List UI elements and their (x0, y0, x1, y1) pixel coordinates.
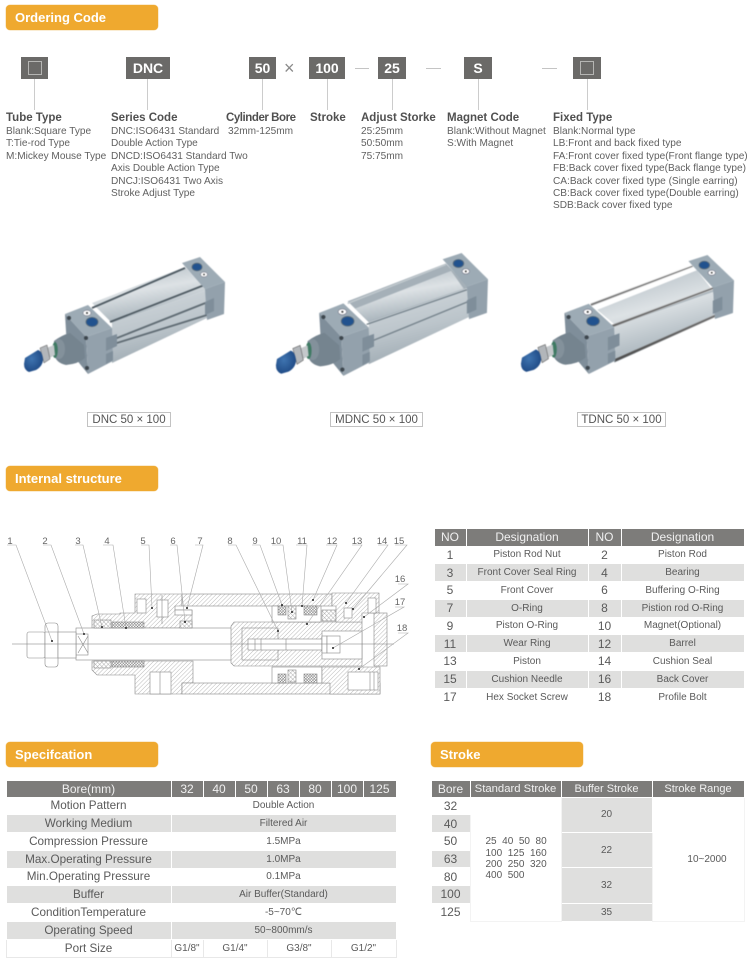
table: specification: Compression Pressure (29, 835, 148, 848)
table: stroke: 100 (440, 887, 461, 901)
label: tube type: Tube Type (6, 112, 62, 124)
code box: fixed type (573, 57, 601, 79)
table: part designations: 11 (444, 637, 456, 651)
table: stroke: 63 (444, 852, 457, 866)
table: specification (6, 781, 397, 958)
label: cylinder bore (226, 112, 296, 137)
leader lines and numbers (7, 545, 408, 670)
table: part designations: Front Cover Seal Ring (478, 567, 576, 578)
label: series code (111, 112, 248, 199)
code box: 100 (309, 57, 345, 79)
table: part designations: 14 (598, 654, 611, 668)
table: stroke: 40 (444, 817, 457, 831)
table: part designations: Pistion rod O-Ring (642, 603, 723, 614)
label: series code: DNCD:ISO6431 Standard Two (111, 151, 248, 162)
front cover (92, 594, 193, 694)
table: part designations: Buffering O-Ring (645, 585, 720, 596)
table: stroke: 20 (601, 809, 612, 820)
table: part designations: 12 (598, 637, 611, 651)
table: part designations: 16 (598, 672, 611, 686)
table: part designations: 6 (601, 583, 608, 597)
piston rod (76, 628, 242, 660)
label: cylinder bore: Cylinder Bore (226, 112, 296, 124)
table: part designations: Piston Rod Nut (493, 549, 561, 560)
table: part designations: 2 (601, 548, 608, 562)
table: specification: 50 (244, 782, 258, 796)
cross-section diagram: 11 (297, 536, 307, 547)
table: part designations (435, 529, 744, 704)
table: part designations: Magnet(Optional) (644, 620, 721, 631)
table: specification: 0.1MPa (266, 871, 301, 882)
label: fixed type (553, 112, 748, 211)
table: part designations: 4 (601, 566, 608, 580)
table: part designations: 5 (447, 583, 453, 597)
cross-section diagram: 5 (140, 536, 146, 547)
table: stroke (432, 781, 745, 922)
heading: specification: Specifcation (15, 747, 92, 762)
table: part designations: Piston Rod (658, 549, 707, 560)
code box: tube type (21, 57, 48, 79)
heading: ordering code (6, 5, 158, 30)
caption: TDNC: TDNC 50 × 100 (581, 414, 662, 426)
table: stroke: 50 (444, 834, 457, 848)
table: specification: Buffer (73, 888, 104, 901)
table: specification: Working Medium (45, 817, 132, 830)
table: part designations: 10 (598, 619, 611, 633)
caption: MDNC: MDNC 50 × 100 (335, 414, 418, 426)
table: specification: Max.Operating Pressure (25, 853, 152, 866)
table: stroke: Stroke Range (664, 782, 732, 794)
cross-section diagram: 8 (227, 536, 233, 547)
cross-section diagram: 14 (377, 536, 387, 547)
label: magnet code: Blank:Without Magnet (447, 126, 546, 137)
cross-section diagram: 9 (252, 536, 258, 547)
table: specification: 100 (337, 782, 357, 796)
table: specification: Operating Speed (44, 924, 133, 937)
table: stroke: Standard Stroke (475, 782, 556, 794)
table: specification: G3/8" (286, 943, 312, 954)
table: part designations: Wear Ring (503, 638, 551, 649)
label: adjust stroke: 75:75mm (361, 151, 403, 162)
label: stroke: Stroke (310, 112, 346, 124)
code box: 50: 50 (255, 60, 270, 76)
label: tube type (6, 112, 106, 162)
label: adjust stroke: Adjust Storke (361, 112, 436, 124)
table: part designations: 13 (443, 654, 457, 668)
table: specification: G1/2" (351, 943, 376, 954)
table: part designations: Profile Bolt (658, 692, 707, 703)
table: specification: 1.0MPa (266, 854, 301, 865)
table: part designations: 9 (447, 619, 453, 633)
label: fixed type: Fixed Type (553, 112, 612, 124)
heading: internal structure: Internal structure (15, 471, 122, 486)
cross-section diagram: 18 (397, 623, 407, 634)
cross-section diagram: 7 (197, 536, 203, 547)
code box: DNC: DNC (133, 60, 163, 76)
label: fixed type: Blank:Normal type (553, 126, 635, 137)
cross-section diagram: 15 (394, 536, 404, 547)
code box: S (464, 57, 492, 79)
table: stroke: 25 40 50 80 100 125 160 200 250 320 400 500 (486, 836, 547, 881)
table: specification: Double Action (253, 800, 314, 811)
code box: 100: 100 (315, 60, 339, 76)
label: fixed type: SDB:Back cover fixed type (553, 200, 672, 211)
cross-section diagram: 17 (395, 597, 405, 608)
code box: 50 (249, 57, 276, 79)
table: specification: G1/4" (222, 943, 248, 954)
cylinder photo: MDNC (276, 253, 488, 376)
table: part designations: Cushion Seal (653, 656, 712, 667)
label: cylinder bore: 32mm-125mm (228, 126, 293, 137)
table: part designations: 1 (447, 548, 453, 562)
heading: internal structure (6, 466, 158, 491)
cross-section diagram: 13 (352, 536, 362, 547)
cross-section diagram: 6 (170, 536, 176, 547)
table: part designations: NO (596, 530, 614, 544)
label: magnet code (447, 112, 546, 149)
table: part designations: Piston (513, 656, 541, 667)
heading: stroke (431, 742, 583, 767)
table: specification: 125 (369, 782, 390, 796)
code box: DNC (126, 57, 170, 79)
table: specification: G1/8" (174, 943, 200, 954)
cross-section diagram: 16 (395, 574, 405, 585)
table: part designations: Front Cover (501, 585, 553, 596)
table: specification: Port Size (65, 942, 112, 955)
cross-section diagram: 2 (42, 536, 48, 547)
cross-section diagram: 10 (271, 536, 281, 547)
label: fixed type: FA:Front cover fixed type(Front flange type) (553, 151, 748, 162)
back cover (322, 593, 387, 694)
table: stroke: 22 (601, 845, 612, 856)
label: series code: Stroke Adjust Type (111, 188, 195, 199)
table: part designations: 17 (443, 690, 457, 704)
label: series code: Double Action Type (111, 138, 198, 149)
seals and bearings (94, 606, 336, 683)
table: specification: Bore(mm) (62, 782, 115, 796)
label: magnet code: S:With Magnet (447, 138, 513, 149)
label: tube type: Blank:Square Type (6, 126, 91, 137)
table: stroke: 32 (601, 880, 612, 891)
table: specification: Motion Pattern (50, 799, 126, 812)
cylinder photo: DNC (24, 257, 225, 374)
table: stroke: Buffer Stroke (574, 782, 638, 794)
table: part designations: Designation (495, 530, 559, 544)
table: part designations: Piston O-Ring (496, 620, 558, 631)
table: stroke: 35 (601, 907, 612, 918)
table: part designations: 15 (443, 672, 457, 686)
table: part designations: 8 (601, 601, 608, 615)
table: part designations: Hex Socket Screw (486, 692, 568, 703)
label: fixed type: CB:Back cover fixed type(Double earring) (553, 188, 739, 199)
multiply sign: × (284, 58, 295, 78)
cross-section diagram: 1 (7, 536, 13, 547)
table: part designations: 3 (447, 566, 453, 580)
table: part designations: Cushion Needle (491, 674, 563, 685)
cross-section diagram: 4 (104, 536, 110, 547)
label: fixed type: FB:Back cover fixed type(Back flange type) (553, 163, 746, 174)
label: adjust stroke (361, 112, 436, 162)
caption: DNC (87, 412, 171, 427)
table: specification: -5~70℃ (265, 907, 302, 918)
label: adjust stroke: 25:25mm (361, 126, 403, 137)
cross-section diagram: 3 (75, 536, 81, 547)
table: specification: 1.5MPa (266, 836, 301, 847)
cross-section diagram (7, 536, 409, 694)
label: magnet code: Magnet Code (447, 112, 519, 124)
table: stroke: Bore (438, 782, 463, 796)
table: specification: Air Buffer(Standard) (239, 889, 328, 900)
table: specification: 40 (212, 782, 226, 796)
code box: S: S (473, 60, 483, 76)
cross-section diagram: 12 (327, 536, 337, 547)
label: tube type: M:Mickey Mouse Type (6, 151, 106, 162)
table: part designations: NO (441, 530, 459, 544)
table: part designations: Designation (651, 530, 714, 544)
table: part designations: Bearing (665, 567, 700, 578)
code box: 25: 25 (384, 60, 400, 76)
label: series code: Axis Double Action Type (111, 163, 220, 174)
label: adjust stroke: 50:50mm (361, 138, 403, 149)
barrel (182, 594, 380, 694)
nut (27, 623, 76, 667)
heading: specification (6, 742, 158, 767)
table: stroke: 10~2000 (687, 854, 727, 864)
table: stroke: 80 (444, 870, 457, 884)
heading: stroke: Stroke (440, 747, 480, 762)
caption: DNC: DNC 50 × 100 (92, 414, 166, 426)
label: series code: DNC:ISO6431 Standard (111, 126, 219, 137)
piston (231, 616, 362, 673)
table: part designations: O-Ring (511, 603, 543, 614)
label: series code: Series Code (111, 112, 177, 124)
table: specification: Min.Operating Pressure (27, 870, 150, 883)
table: specification: Filtered Air (260, 818, 307, 829)
table: specification: 80 (308, 782, 322, 796)
cylinder photo: TDNC (521, 255, 734, 374)
code box: 25 (378, 57, 406, 79)
table: part designations: 7 (447, 601, 453, 615)
label: series code: DNCJ:ISO6431 Two Axis (111, 176, 223, 187)
table: specification: 50~800mm/s (254, 925, 313, 936)
label: tube type: T:Tie-rod Type (6, 138, 70, 149)
table: part designations: Back Cover (657, 674, 708, 685)
table: specification: 63 (276, 782, 290, 796)
label: fixed type: LB:Front and back fixed type (553, 138, 682, 149)
heading: ordering code: Ordering Code (15, 10, 106, 25)
table: specification: ConditionTemperature (31, 906, 146, 919)
label: fixed type: CA:Back cover fixed type (Single earring) (553, 176, 738, 187)
table: stroke: 32 (444, 799, 457, 813)
table: stroke: 125 (440, 905, 461, 919)
table: part designations: Barrel (669, 638, 696, 649)
table: part designations: 18 (598, 690, 611, 704)
table: specification: 32 (180, 782, 194, 796)
